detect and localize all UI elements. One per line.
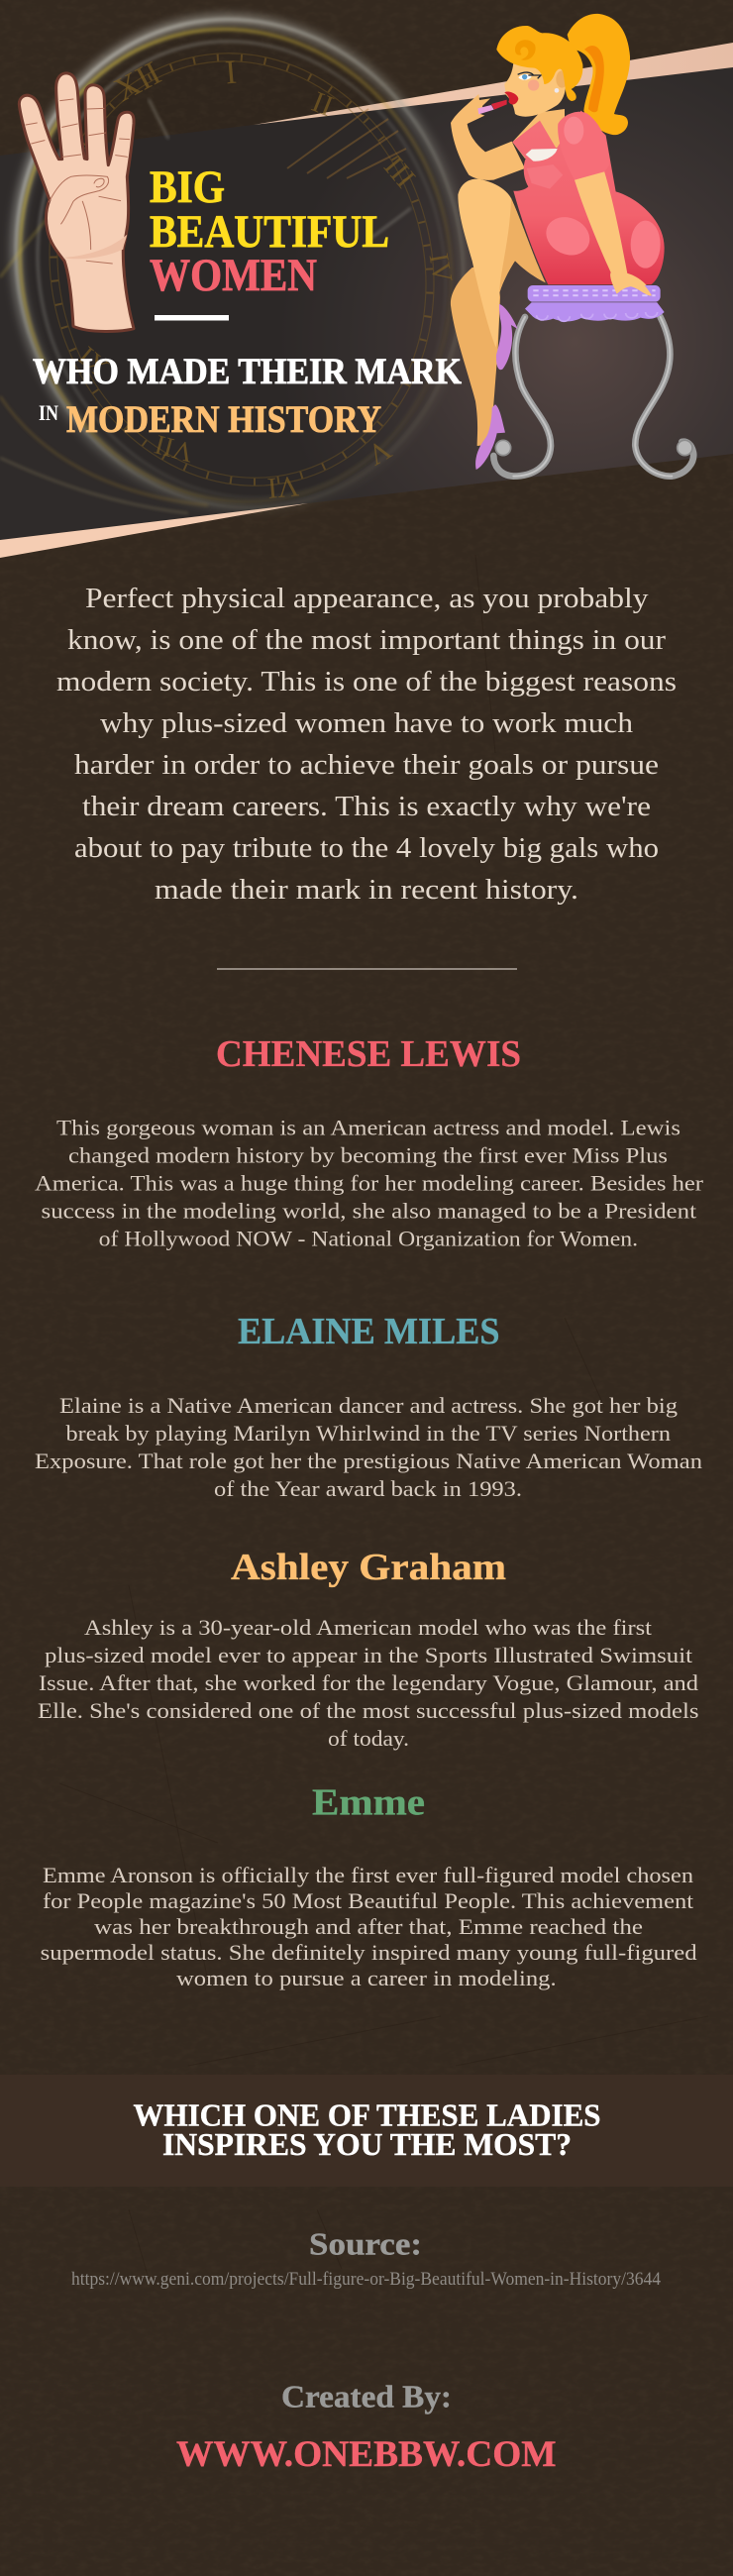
text: Ashley Graham bio: of today. [328, 1726, 409, 1751]
ponytail [568, 14, 630, 135]
neck [512, 109, 565, 159]
clock numerals: III [377, 151, 422, 194]
top pink wedge [254, 43, 733, 125]
subtitle: who made their mark in modern history: WHO MADE THEIR MARK [33, 352, 462, 392]
intro paragraph: their dream careers. This is exactly why we're [82, 792, 651, 822]
far arm [451, 94, 525, 180]
call to action band: WHICH ONE OF THESE LADIES [133, 2096, 600, 2132]
header panel [0, 0, 733, 559]
intro paragraph: Perfect physical appearance, as you probably [85, 584, 648, 614]
text: Chenese Lewis bio: changed modern history by becoming the first ever Miss Plus [68, 1143, 668, 1167]
call to action band: INSPIRES YOU THE MOST? [162, 2126, 572, 2162]
dress [512, 111, 665, 284]
stool seat [528, 285, 661, 302]
clock numerals: I [224, 54, 238, 91]
clock light streaks [0, 99, 411, 513]
credits block [176, 2378, 557, 2475]
intro paragraph: harder in order to achieve their goals or pursue [74, 750, 659, 781]
text: Emme bio [41, 1863, 697, 1990]
text: Chenese Lewis bio [35, 1116, 704, 1250]
text: Emme bio: women to pursue a career in modeling. [176, 1966, 557, 1990]
far leg [451, 265, 500, 446]
text: Ashley Graham bio: Issue. After that, she worked for the legendary Vogue, Glamour, and [39, 1670, 698, 1695]
illustration: woman on stool applying lipstick [451, 14, 693, 477]
intro paragraph: about to pay tribute to the 4 lovely big gals who [74, 833, 659, 864]
front hair [496, 26, 582, 101]
title: Big Beautiful Women [150, 161, 389, 301]
intro paragraph: modern society. This is one of the biggest reasons [56, 667, 677, 698]
credits block: Created By: [281, 2378, 452, 2414]
text: Chenese Lewis bio: success in the modeling world, she also managed to be a President [42, 1199, 696, 1223]
panel: Ashley Graham [38, 1547, 699, 1751]
clock numerals [72, 54, 458, 504]
title: Big Beautiful Women: BIG [150, 161, 225, 213]
clock numerals: VII [152, 428, 197, 468]
credits block: WWW.ONEBBW.COM [176, 2434, 557, 2475]
text: Ashley Graham bio [38, 1615, 699, 1751]
heading: Elaine Miles: ELAINE MILES [238, 1311, 499, 1352]
clock numerals: XI [72, 340, 115, 382]
text: Elaine Miles bio: Exposure. That role got her the prestigious Native American Woman [35, 1449, 702, 1473]
heading: Chenese Lewis: CHENESE LEWIS [216, 1033, 521, 1075]
hand on seat [610, 271, 652, 295]
text: Ashley Graham bio: Elle. She's considered one of the most successful plus-sized models [38, 1698, 699, 1723]
intro paragraph [56, 584, 677, 906]
subtitle: who made their mark in modern history: MODERN HISTORY [66, 398, 381, 441]
subtitle: who made their mark in modern history: IN [39, 400, 58, 425]
clock numerals: VI [266, 470, 300, 504]
icon: hand showing four fingers [19, 73, 134, 331]
lipstick [477, 105, 494, 114]
collar [526, 149, 558, 161]
stool legs [493, 317, 693, 477]
text: Elaine Miles bio [35, 1393, 702, 1501]
clock numerals: XII [109, 54, 167, 109]
source block: https://www.geni.com/projects/Full-figure-or-Big-Beautiful-Women-in-History/3644 [71, 2270, 661, 2290]
panel: Chenese Lewis [35, 1033, 704, 1250]
call to action band [0, 2075, 733, 2187]
text: Elaine Miles bio: break by playing Marilyn Whirlwind in the TV series Northern [65, 1421, 671, 1446]
intro paragraph: made their mark in recent history. [155, 875, 578, 906]
text: Emme bio: Emme Aronson is officially the first ever full-figured model chosen [43, 1863, 693, 1887]
clock illustration [0, 0, 518, 559]
divider line [217, 969, 517, 970]
bottom pink wedge [0, 503, 308, 558]
shoes [496, 304, 518, 370]
subtitle: who made their mark in modern history [33, 352, 462, 441]
text: Ashley Graham bio: Ashley is a 30-year-old American model who was the first [84, 1615, 652, 1640]
text: Elaine Miles bio: Elaine is a Native American dancer and actress. She got her big [59, 1393, 678, 1418]
intro paragraph: know, is one of the most important things in our [67, 625, 667, 656]
heading: Ashley Graham: Ashley Graham [231, 1547, 506, 1588]
text: Ashley Graham bio: plus-sized model ever to appear in the Sports Illustrated Swimsuit [45, 1643, 692, 1667]
title: Big Beautiful Women: BEAUTIFUL [150, 206, 389, 258]
text: Emme bio: supermodel status. She definitely inspired many young full-figured [41, 1940, 697, 1965]
clock numerals: IV [423, 251, 458, 285]
heading: Emme: Emme [312, 1781, 425, 1823]
clock numerals: V [362, 433, 396, 472]
text: Chenese Lewis bio: America. This was a huge thing for her modeling career. Besides her [35, 1171, 704, 1195]
front thigh [458, 179, 546, 348]
panel: Emme [41, 1781, 697, 1990]
head [504, 50, 567, 117]
text: Chenese Lewis bio: This gorgeous woman is an American actress and model. Lewis [56, 1116, 681, 1139]
source block: Source: [309, 2225, 422, 2261]
intro paragraph: why plus-sized women have to work much [100, 708, 633, 739]
panel: Elaine Miles [35, 1311, 702, 1501]
dark diagonal panel [0, 67, 733, 540]
title: Big Beautiful Women: WOMEN [150, 250, 317, 301]
sleeve and near arm [575, 171, 652, 295]
source block [71, 2225, 661, 2290]
text: Emme bio: was her breakthrough and after that, Emme reached the [94, 1914, 643, 1939]
text: Emme bio: for People magazine's 50 Most Beautiful People. This achievement [43, 1888, 693, 1913]
text: Elaine Miles bio: of the Year award back in 1993. [214, 1476, 522, 1501]
text: Chenese Lewis bio: of Hollywood NOW - National Organization for Women. [99, 1227, 638, 1250]
clock numerals: II [307, 85, 338, 123]
title underline bar [155, 315, 229, 321]
